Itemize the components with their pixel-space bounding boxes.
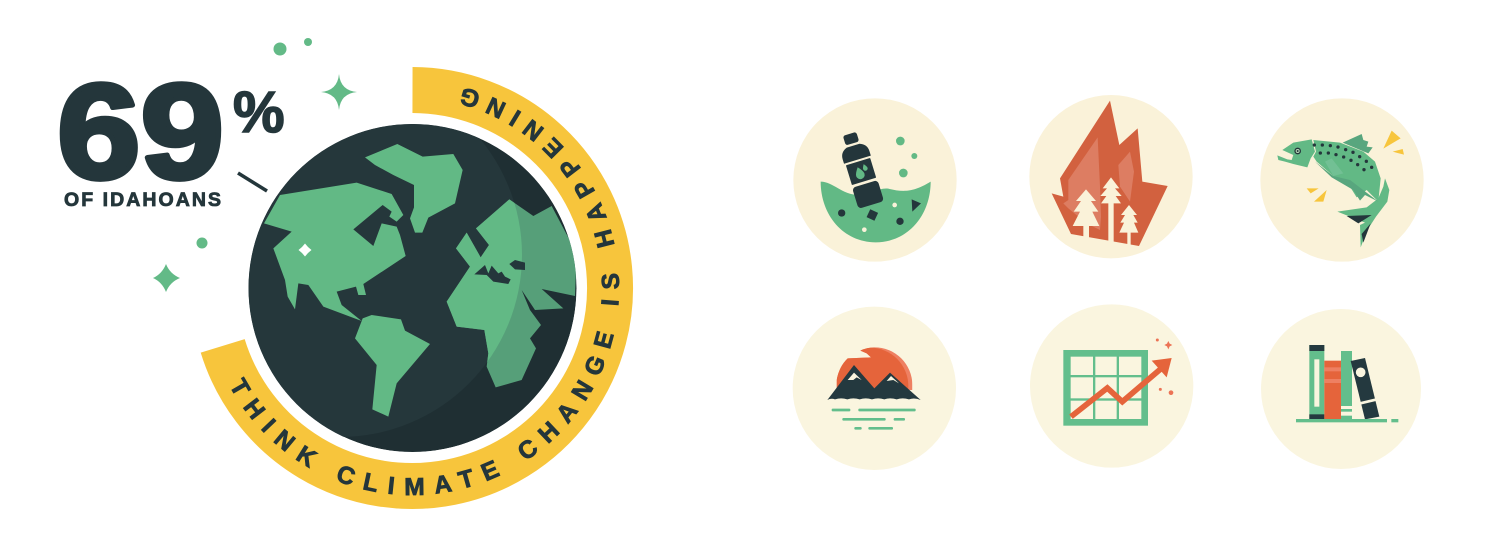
globe lit side <box>248 124 480 437</box>
icon: mountains and sun <box>793 307 956 470</box>
arrow <box>1071 358 1172 417</box>
dorsal fin <box>1343 134 1373 153</box>
pectoral fin <box>1325 158 1343 176</box>
statistic: 69% of Idahoans <box>57 56 285 211</box>
leaning dark book <box>1351 358 1379 419</box>
mountains <box>827 365 921 400</box>
bottle <box>836 130 885 209</box>
flame highlights <box>1063 137 1134 230</box>
icon background <box>1030 304 1193 468</box>
water lines <box>832 409 916 430</box>
inland seas <box>474 260 525 284</box>
white particles <box>862 203 897 232</box>
ring text: THINK CLIMATE CHANGE IS HAPPENING <box>231 88 620 496</box>
Europe and Africa <box>446 199 522 362</box>
spots <box>1313 143 1373 171</box>
big number 69: 69 <box>57 56 224 207</box>
belly <box>1315 162 1378 202</box>
continents in light <box>264 144 522 417</box>
tail <box>1337 178 1389 247</box>
icon: leaping trout <box>1260 98 1424 262</box>
icon: books <box>1261 309 1421 469</box>
thin green book <box>1341 351 1352 419</box>
flame <box>1052 101 1168 246</box>
yellow ring band <box>223 90 610 486</box>
orange book <box>1324 361 1341 419</box>
bubbles <box>896 137 917 177</box>
icon background <box>793 98 957 262</box>
icon background <box>1260 98 1424 262</box>
trees <box>1073 177 1138 245</box>
decorative sparkles and dots <box>153 38 357 292</box>
green book <box>1309 345 1324 419</box>
globe shadow side <box>248 124 576 452</box>
icon background <box>793 307 956 470</box>
South America <box>355 315 430 417</box>
percent sign: % <box>233 80 285 145</box>
shelf <box>1296 419 1398 422</box>
Idaho marker <box>298 244 312 256</box>
debris <box>838 199 921 225</box>
icon background <box>1029 95 1193 258</box>
continents in shadow <box>447 199 577 387</box>
Greenland <box>365 144 463 233</box>
water <box>821 182 931 242</box>
icon: forest fire <box>1029 95 1193 258</box>
pointer line to Idaho <box>238 173 267 191</box>
splash marks <box>1307 131 1404 202</box>
sparkles <box>1156 338 1173 395</box>
icon background <box>1261 309 1421 469</box>
head <box>1277 139 1315 167</box>
body <box>1313 140 1381 202</box>
icon: bottle in polluted water <box>793 98 957 262</box>
globe <box>248 124 576 452</box>
grid <box>1063 350 1148 426</box>
label: of Idahoans: OF IDAHOANS <box>64 189 221 211</box>
eye <box>1294 148 1301 154</box>
North America <box>264 183 406 321</box>
sun <box>836 347 912 390</box>
icon: rising chart <box>1030 304 1193 468</box>
tail accents <box>1347 215 1372 243</box>
snow caps <box>848 373 899 383</box>
